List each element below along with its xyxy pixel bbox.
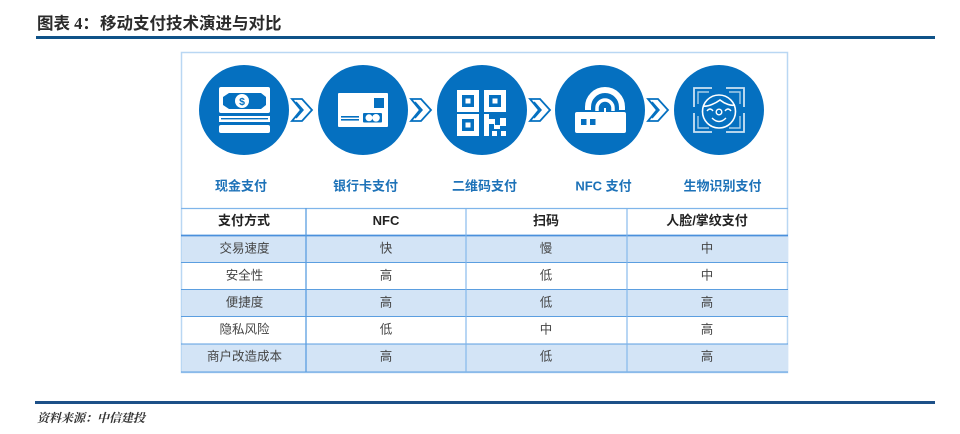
table row: 隐私风险: 低 xyxy=(380,322,393,336)
table row: 交易速度: 快 xyxy=(380,242,393,256)
table row: 便捷度: 高 xyxy=(701,294,713,310)
icon: QR code xyxy=(437,65,527,155)
table row: 商户改造成本: 低 xyxy=(540,350,553,364)
icon: face recognition xyxy=(674,65,764,155)
row shading xyxy=(182,236,788,372)
header rule xyxy=(36,36,935,39)
label: 现金支付: 现金支付 xyxy=(215,178,267,194)
table header: 支付方式 xyxy=(218,213,270,228)
source note: 资料来源：中信建投 xyxy=(37,411,147,425)
table row: 安全性: 安全性 xyxy=(226,268,263,282)
label: NFC 支付: NFC 支付 xyxy=(575,178,632,194)
table row: 安全性: 低 xyxy=(540,268,553,282)
table row: 便捷度: 便捷度 xyxy=(226,294,264,310)
title: 移动支付技术演进与对比 xyxy=(100,13,282,33)
table row: 商户改造成本: 高 xyxy=(701,348,713,364)
table row: 便捷度: 高 xyxy=(380,294,392,310)
table row: 交易速度: 中 xyxy=(701,240,713,256)
table row: 交易速度 xyxy=(219,240,713,256)
label: 二维码支付: 二维码支付 xyxy=(452,178,517,194)
arrow 4 xyxy=(648,99,668,121)
table header: 扫码 xyxy=(533,213,559,228)
icon: NFC reader xyxy=(555,65,645,155)
table header: 人脸/掌纹支付 xyxy=(666,213,748,228)
table header: NFC xyxy=(373,213,400,228)
table header xyxy=(218,213,748,228)
table row: 商户改造成本 xyxy=(207,348,713,364)
table row: 隐私风险: 中 xyxy=(540,322,552,336)
label: 银行卡支付: 银行卡支付 xyxy=(333,178,398,194)
table row: 隐私风险: 隐私风险 xyxy=(219,322,270,336)
table row: 安全性 xyxy=(226,268,713,282)
panel: payment evolution and comparison xyxy=(181,52,788,372)
icon: cash: $ xyxy=(239,96,245,108)
table lines xyxy=(181,208,788,372)
table row: 商户改造成本: 高 xyxy=(380,348,392,364)
footer rule xyxy=(35,401,935,404)
table row: 交易速度: 慢 xyxy=(540,242,553,256)
table row: 隐私风险: 高 xyxy=(701,322,713,336)
arrow 2 xyxy=(411,99,431,121)
icon: cash xyxy=(199,65,289,155)
table row: 安全性: 中 xyxy=(701,268,713,282)
table row: 商户改造成本: 商户改造成本 xyxy=(207,348,282,364)
label: 生物识别支付: 生物识别支付 xyxy=(683,178,762,194)
table row: 隐私风险 xyxy=(219,322,713,336)
icon: bank card xyxy=(318,65,408,155)
arrow 1 xyxy=(292,99,312,121)
comparison table xyxy=(181,208,788,372)
table row: 交易速度: 交易速度 xyxy=(219,240,270,256)
table row: 便捷度: 低 xyxy=(540,296,553,310)
panel frame xyxy=(182,52,788,372)
arrow 3 xyxy=(530,99,550,121)
table row: 便捷度 xyxy=(226,294,713,310)
title: 图表 4： xyxy=(37,14,99,33)
table row: 安全性: 高 xyxy=(380,268,392,282)
